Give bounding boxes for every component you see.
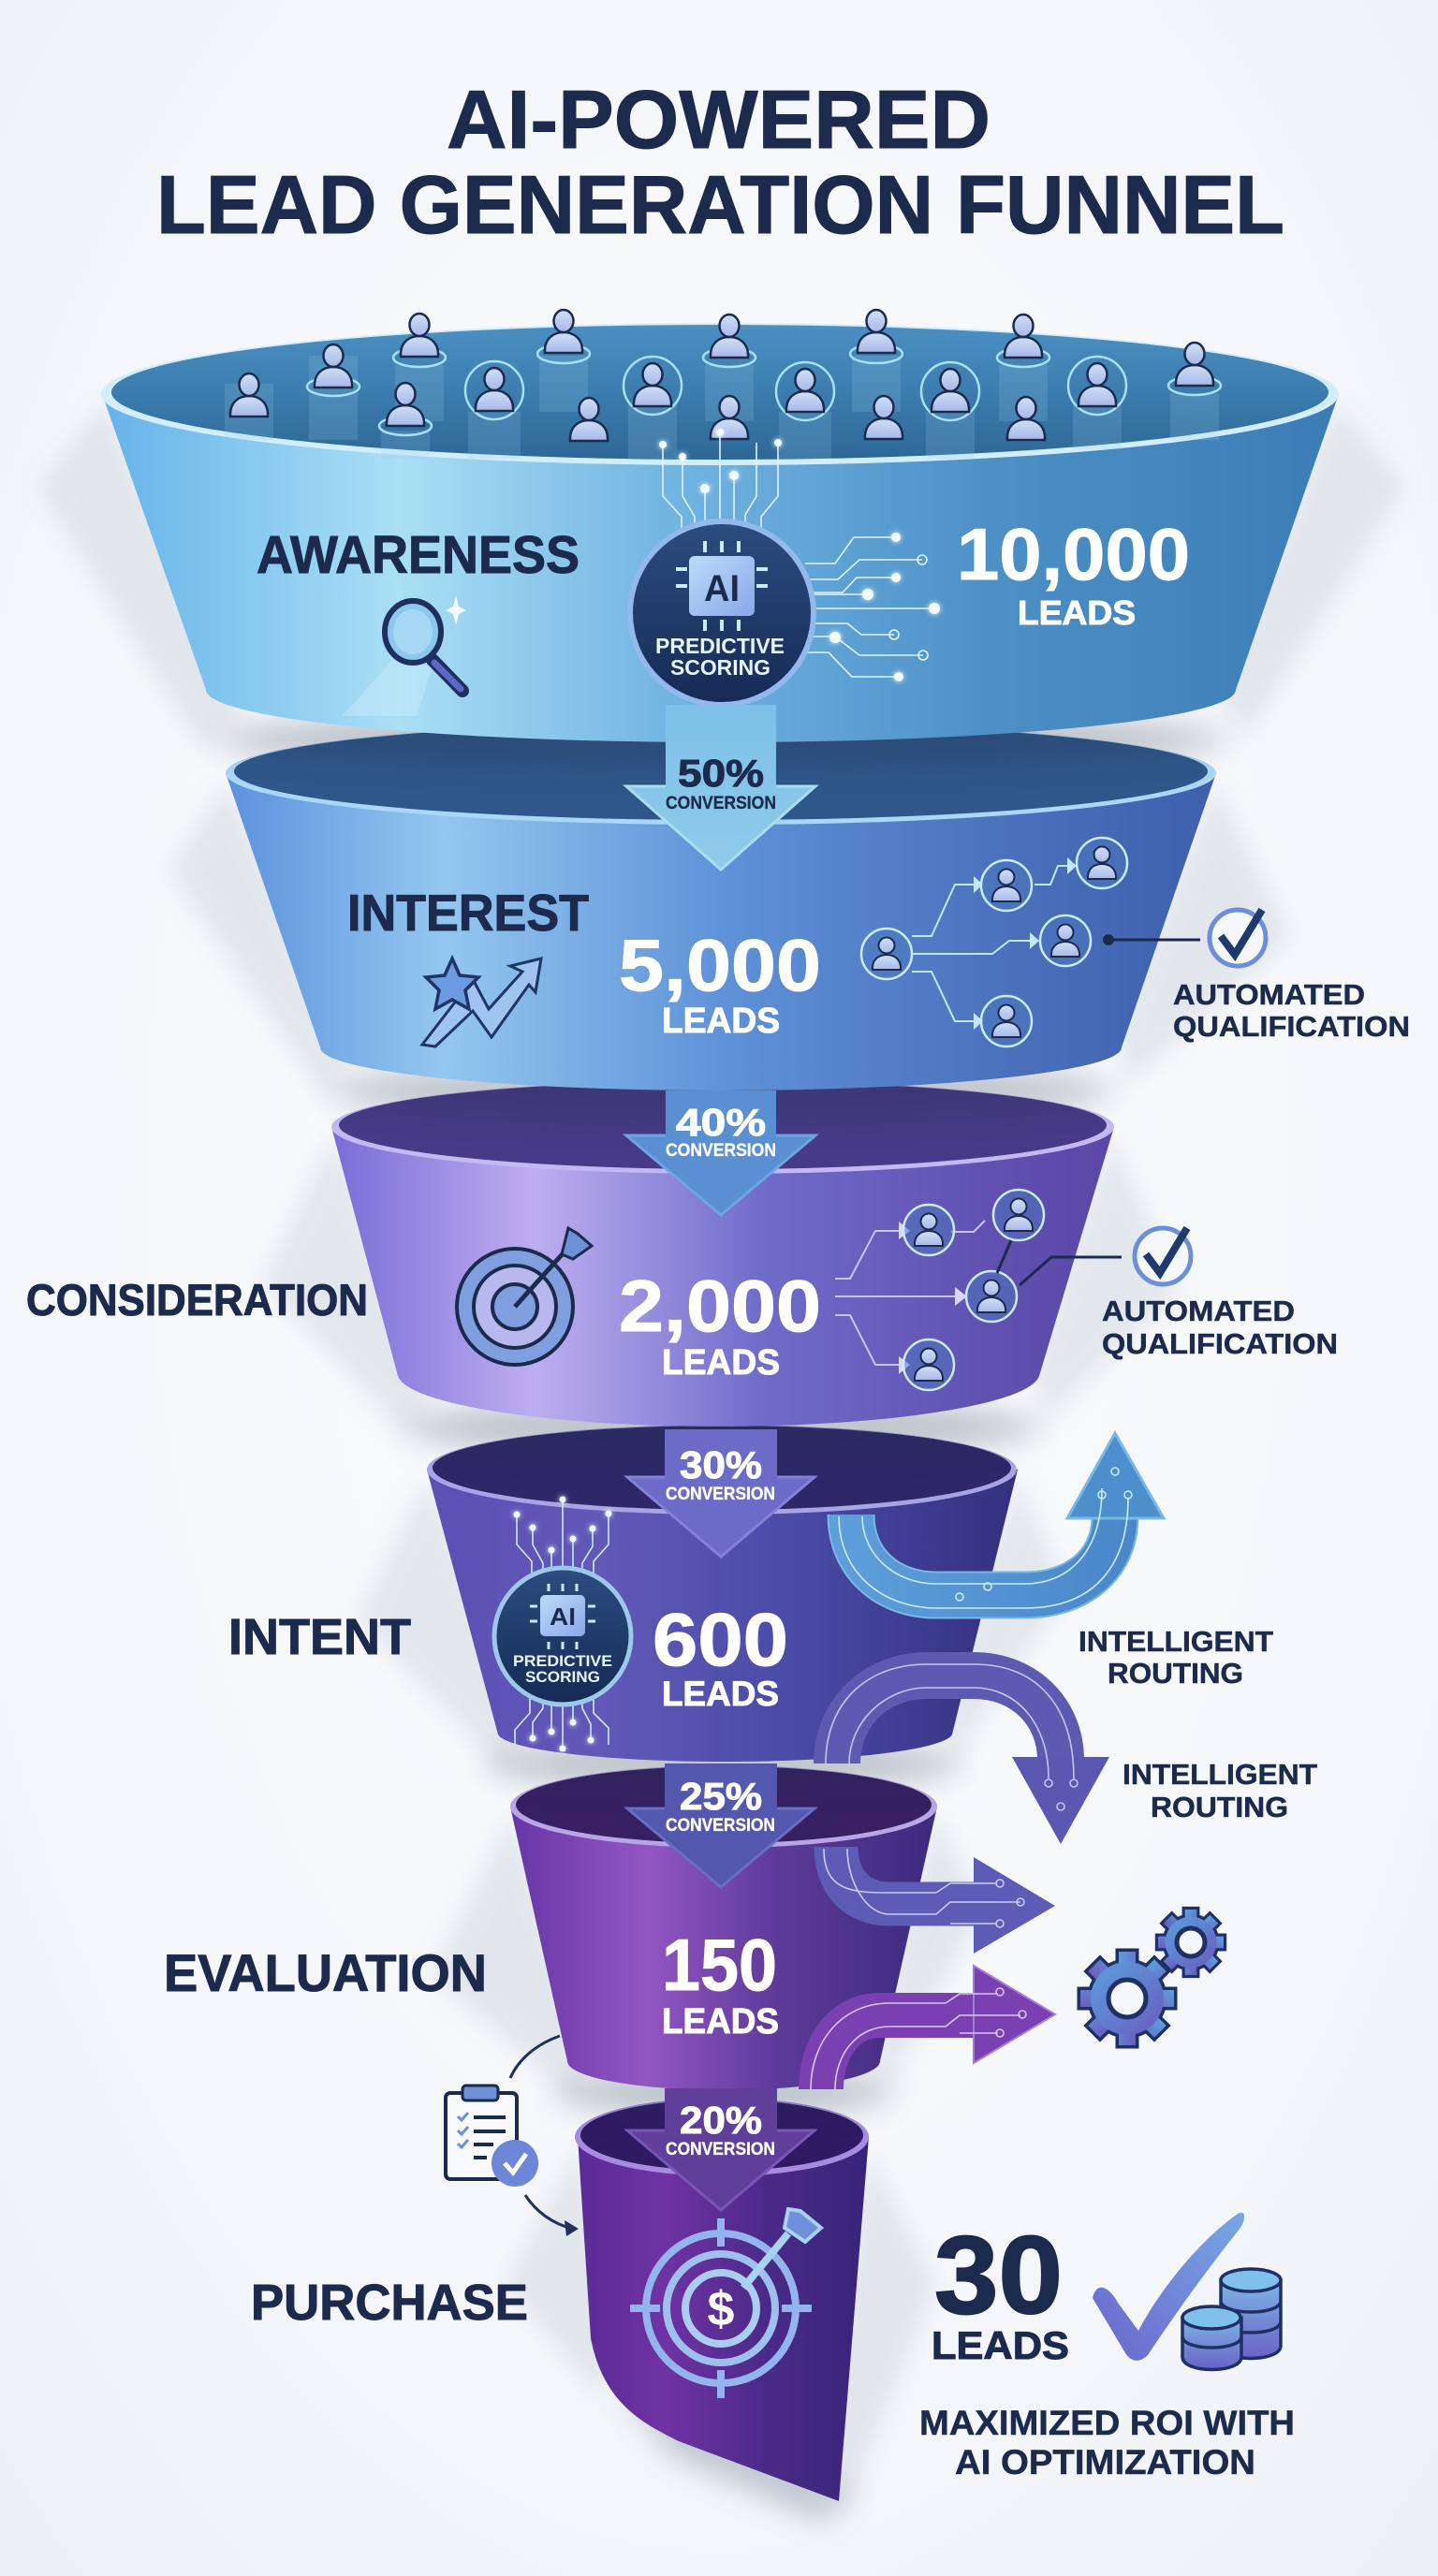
result caption: MAXIMIZED ROI WITH xyxy=(919,2404,1295,2442)
arrow: 50 percent conversion: 50% xyxy=(678,752,764,795)
stat: 150 leads: LEADS xyxy=(662,2002,779,2042)
stat: 600 leads: LEADS xyxy=(662,1675,779,1713)
icon: coin stacks xyxy=(1182,2269,1281,2370)
label: consideration: CONSIDERATION xyxy=(26,1275,368,1325)
callout: automated qualification: AUTOMATED xyxy=(1173,978,1365,1011)
icon: dollar target xyxy=(630,2209,821,2398)
stat: 10,000 leads xyxy=(957,513,1190,632)
funnel stage: interest xyxy=(226,722,1410,1119)
funnel stage: purchase xyxy=(251,2098,869,2523)
arrow: 25 percent conversion: CONVERSION xyxy=(666,1816,775,1836)
circuit: awareness badge xyxy=(659,429,940,681)
result: 30 leads: 30 xyxy=(934,2214,1063,2337)
callout: intelligent routing purple xyxy=(1123,1758,1317,1823)
stat: 5,000 leads xyxy=(619,924,821,1041)
cast shadows behind funnel xyxy=(37,402,1404,2518)
result caption: AI OPTIMIZATION xyxy=(955,2443,1255,2481)
funnel stage: consideration xyxy=(26,1080,1338,1456)
icon: target with arrow xyxy=(457,1228,592,1365)
network: consideration leads xyxy=(835,1190,1044,1390)
badge: predictive scoring awareness: AI xyxy=(704,568,740,609)
title xyxy=(156,73,1284,251)
arrow: 50 percent conversion xyxy=(626,705,815,870)
callout: intelligent routing blue: ROUTING xyxy=(1108,1657,1243,1690)
callout: automated qualification xyxy=(1103,910,1410,1043)
stat: 10,000 leads: LEADS xyxy=(1018,593,1136,632)
routing arrow: purple down xyxy=(826,1664,1109,1844)
result caption xyxy=(919,2404,1295,2481)
stat: 2,000 leads: LEADS xyxy=(662,1343,780,1383)
stat: 5,000 leads: 5,000 xyxy=(619,924,821,1006)
funnel stage: awareness xyxy=(101,310,1339,766)
stat: 600 leads xyxy=(653,1598,788,1713)
badge: predictive scoring intent: AI xyxy=(550,1603,576,1631)
badge: predictive scoring intent: PREDICTIVE xyxy=(513,1652,612,1670)
icon: star and rising arrow xyxy=(422,959,541,1046)
arrow: 30 percent conversion: 30% xyxy=(680,1443,762,1486)
callout: automated qualification xyxy=(1020,1228,1338,1360)
label: interest: INTEREST xyxy=(347,884,589,942)
arrow: 50 percent conversion: CONVERSION xyxy=(666,794,776,813)
badge: predictive scoring awareness: SCORING xyxy=(670,655,770,680)
badge: predictive scoring awareness xyxy=(630,521,814,705)
arrow: 40 percent conversion: 40% xyxy=(676,1101,766,1144)
label: intent: INTENT xyxy=(228,1609,411,1665)
stat: 10,000 leads: 10,000 xyxy=(957,513,1190,595)
people entering funnel xyxy=(225,310,1221,459)
funnel stage: intent xyxy=(228,1425,1018,1789)
icon: dollar target: $ xyxy=(708,2282,735,2336)
label: purchase: PURCHASE xyxy=(251,2275,528,2331)
label: awareness: AWARENESS xyxy=(257,525,580,585)
arrow: 20 percent conversion xyxy=(627,2088,814,2210)
label: evaluation: EVALUATION xyxy=(164,1943,487,2002)
arrow: 25 percent conversion xyxy=(627,1764,814,1887)
title: AI-POWERED xyxy=(447,73,990,166)
badge: predictive scoring intent xyxy=(494,1568,631,1705)
circuit: intent badge xyxy=(513,1496,612,1752)
arrow: 25 percent conversion: 25% xyxy=(680,1775,762,1818)
arrow: 20 percent conversion: CONVERSION xyxy=(666,2140,775,2159)
callout: automated qualification: AUTOMATED xyxy=(1102,1295,1295,1327)
icon: clipboard with check xyxy=(446,2036,579,2236)
callout: intelligent routing purple: INTELLIGENT xyxy=(1123,1758,1317,1791)
badge: predictive scoring intent: SCORING xyxy=(525,1668,600,1686)
funnel stage: evaluation xyxy=(164,1765,937,2115)
title: LEAD GENERATION FUNNEL xyxy=(156,158,1284,251)
stat: 600 leads: 600 xyxy=(653,1598,788,1681)
arrow: 20 percent conversion: 20% xyxy=(680,2099,762,2142)
callout: automated qualification: QUALIFICATION xyxy=(1173,1010,1410,1043)
icon: gears xyxy=(1080,1910,1224,2045)
routing arrow: right from evaluation xyxy=(824,1847,1055,1954)
callout: intelligent routing blue: INTELLIGENT xyxy=(1078,1625,1273,1658)
result: 30 leads: LEADS xyxy=(932,2323,1069,2367)
stat: 150 leads: 150 xyxy=(662,1924,777,2006)
network: interest leads xyxy=(861,838,1127,1046)
arrow: 30 percent conversion xyxy=(627,1429,814,1557)
arrow: 40 percent conversion: CONVERSION xyxy=(666,1141,776,1161)
icon: magnifying glass xyxy=(342,595,466,716)
stat: 5,000 leads: LEADS xyxy=(662,1002,780,1041)
routing arrow: blue up xyxy=(839,1433,1164,1608)
stat: 150 leads xyxy=(662,1924,779,2042)
stat: 2,000 leads: 2,000 xyxy=(619,1265,821,1347)
badge: predictive scoring awareness: PREDICTIVE xyxy=(655,634,785,658)
routing arrow: right to gears xyxy=(811,1966,1055,2089)
icon: big check mark xyxy=(1093,2213,1244,2361)
arrow: 40 percent conversion xyxy=(626,1090,815,1215)
arrow: 30 percent conversion: CONVERSION xyxy=(666,1485,775,1504)
callout: intelligent routing purple: ROUTING xyxy=(1151,1791,1288,1823)
callout: automated qualification: QUALIFICATION xyxy=(1102,1327,1338,1360)
stat: 2,000 leads xyxy=(619,1265,821,1383)
callout: intelligent routing blue xyxy=(1078,1625,1273,1690)
